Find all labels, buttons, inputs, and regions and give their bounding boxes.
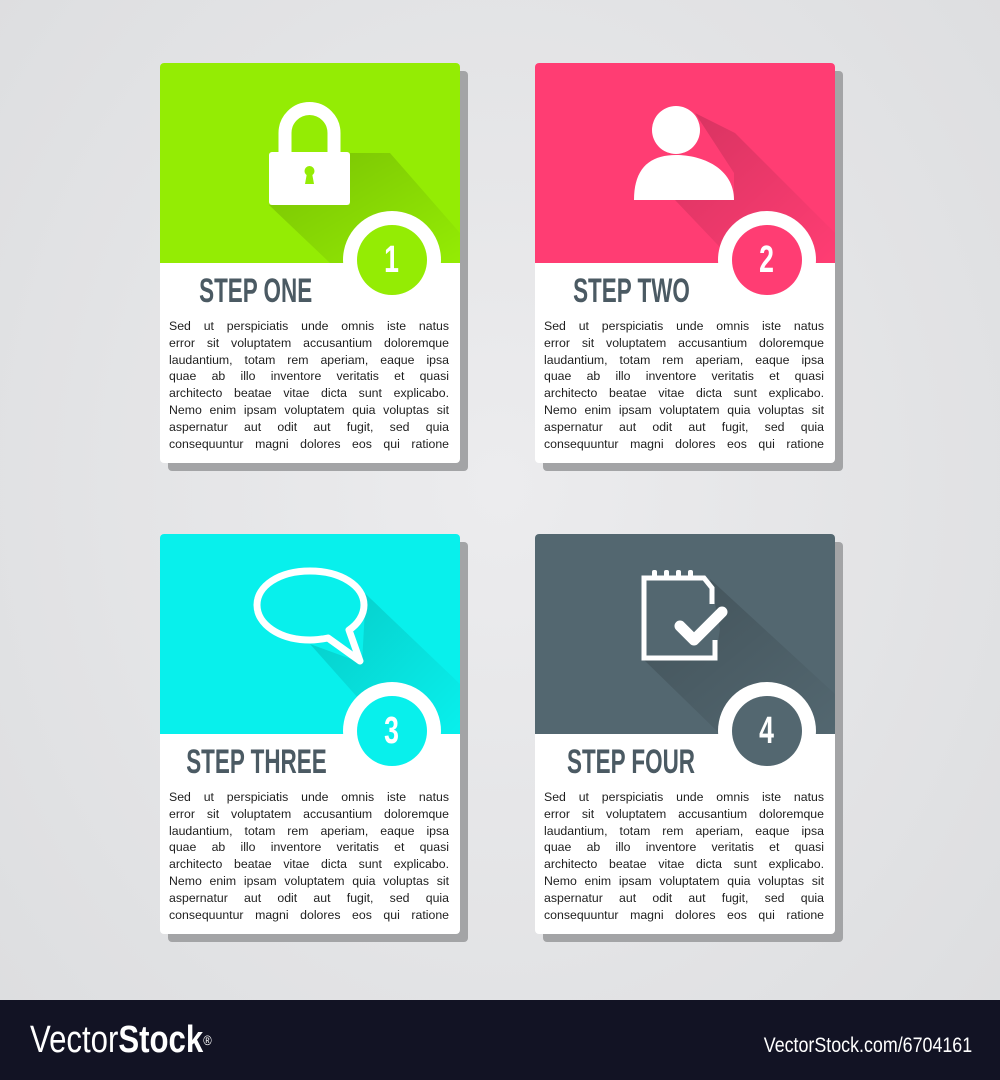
text block: aspernatur aut odit aut fugit, sed quia (169, 420, 449, 434)
number badge 2 (718, 211, 816, 309)
text block: laudantium, totam rem aperiam, eaque ipsa (544, 353, 824, 367)
card: step four: 4 (760, 710, 774, 752)
logo: VectorStock: VectorStock® (30, 1019, 212, 1061)
text block: consequuntur magni dolores eos qui ratione (169, 908, 449, 922)
text block: consequuntur magni dolores eos qui ratione (544, 908, 824, 922)
text block: Sed ut perspiciatis unde omnis iste natus (169, 790, 449, 804)
text block: error sit voluptatem accusantium doloremque (169, 336, 449, 350)
card: step three: 3 (385, 710, 399, 752)
text block: aspernatur aut odit aut fugit, sed quia (544, 420, 824, 434)
text block: architecto beatae vitae dicta sunt explicabo. (544, 857, 824, 871)
number badge 4 (718, 682, 816, 780)
text block: consequuntur magni dolores eos qui ratione (544, 437, 824, 451)
card: step three (160, 534, 468, 942)
icon: padlock (269, 102, 451, 263)
text block: quae ab illo inventore veritatis et quasi (169, 369, 449, 383)
text block: error sit voluptatem accusantium doloremque (544, 336, 824, 350)
text block (169, 790, 449, 922)
colored header: slate (535, 534, 835, 734)
footer bar (0, 1000, 1000, 1080)
heading: STEP FOUR (567, 743, 695, 781)
text block: consequuntur magni dolores eos qui ratione (169, 437, 449, 451)
colored header: pink (535, 63, 835, 263)
text block: Sed ut perspiciatis unde omnis iste natus (544, 319, 824, 333)
text block: aspernatur aut odit aut fugit, sed quia (169, 891, 449, 905)
number badge 3 (343, 682, 441, 780)
text block: Sed ut perspiciatis unde omnis iste natus (169, 319, 449, 333)
heading: STEP THREE (186, 743, 326, 781)
card: step two (535, 63, 843, 471)
footer url: VectorStock.com/6704161 (764, 1034, 972, 1057)
text block: architecto beatae vitae dicta sunt explicabo. (169, 857, 449, 871)
heading: STEP ONE (199, 272, 313, 310)
text block: laudantium, totam rem aperiam, eaque ipsa (169, 824, 449, 838)
text block: Nemo enim ipsam voluptatem quia voluptas sit (544, 874, 824, 888)
text block: Nemo enim ipsam voluptatem quia voluptas sit (169, 874, 449, 888)
text block: architecto beatae vitae dicta sunt explicabo. (169, 386, 449, 400)
number badge 1 (343, 211, 441, 309)
text block: quae ab illo inventore veritatis et quasi (169, 840, 449, 854)
text block: aspernatur aut odit aut fugit, sed quia (544, 891, 824, 905)
colored header: green (160, 63, 460, 263)
heading: STEP TWO (573, 272, 689, 310)
text block: quae ab illo inventore veritatis et quasi (544, 840, 824, 854)
text block: laudantium, totam rem aperiam, eaque ipsa (544, 824, 824, 838)
icon: speech bubble (254, 568, 450, 698)
card: step one: 1 (385, 239, 399, 281)
text block: quae ab illo inventore veritatis et quasi (544, 369, 824, 383)
colored header: cyan (160, 534, 460, 734)
icon: user (634, 106, 818, 247)
text block: architecto beatae vitae dicta sunt explicabo. (544, 386, 824, 400)
card: step four (535, 534, 843, 942)
text block: error sit voluptatem accusantium doloremque (169, 807, 449, 821)
text block: laudantium, totam rem aperiam, eaque ipsa (169, 353, 449, 367)
icon: notepad with check (642, 570, 790, 720)
text block (544, 319, 824, 451)
text block: Sed ut perspiciatis unde omnis iste natus (544, 790, 824, 804)
card: step two: 2 (760, 239, 774, 281)
text block: Nemo enim ipsam voluptatem quia voluptas sit (169, 403, 449, 417)
text block (544, 790, 824, 922)
text block: error sit voluptatem accusantium doloremque (544, 807, 824, 821)
text block (169, 319, 449, 451)
text block: Nemo enim ipsam voluptatem quia voluptas sit (544, 403, 824, 417)
card: step one (160, 63, 468, 471)
